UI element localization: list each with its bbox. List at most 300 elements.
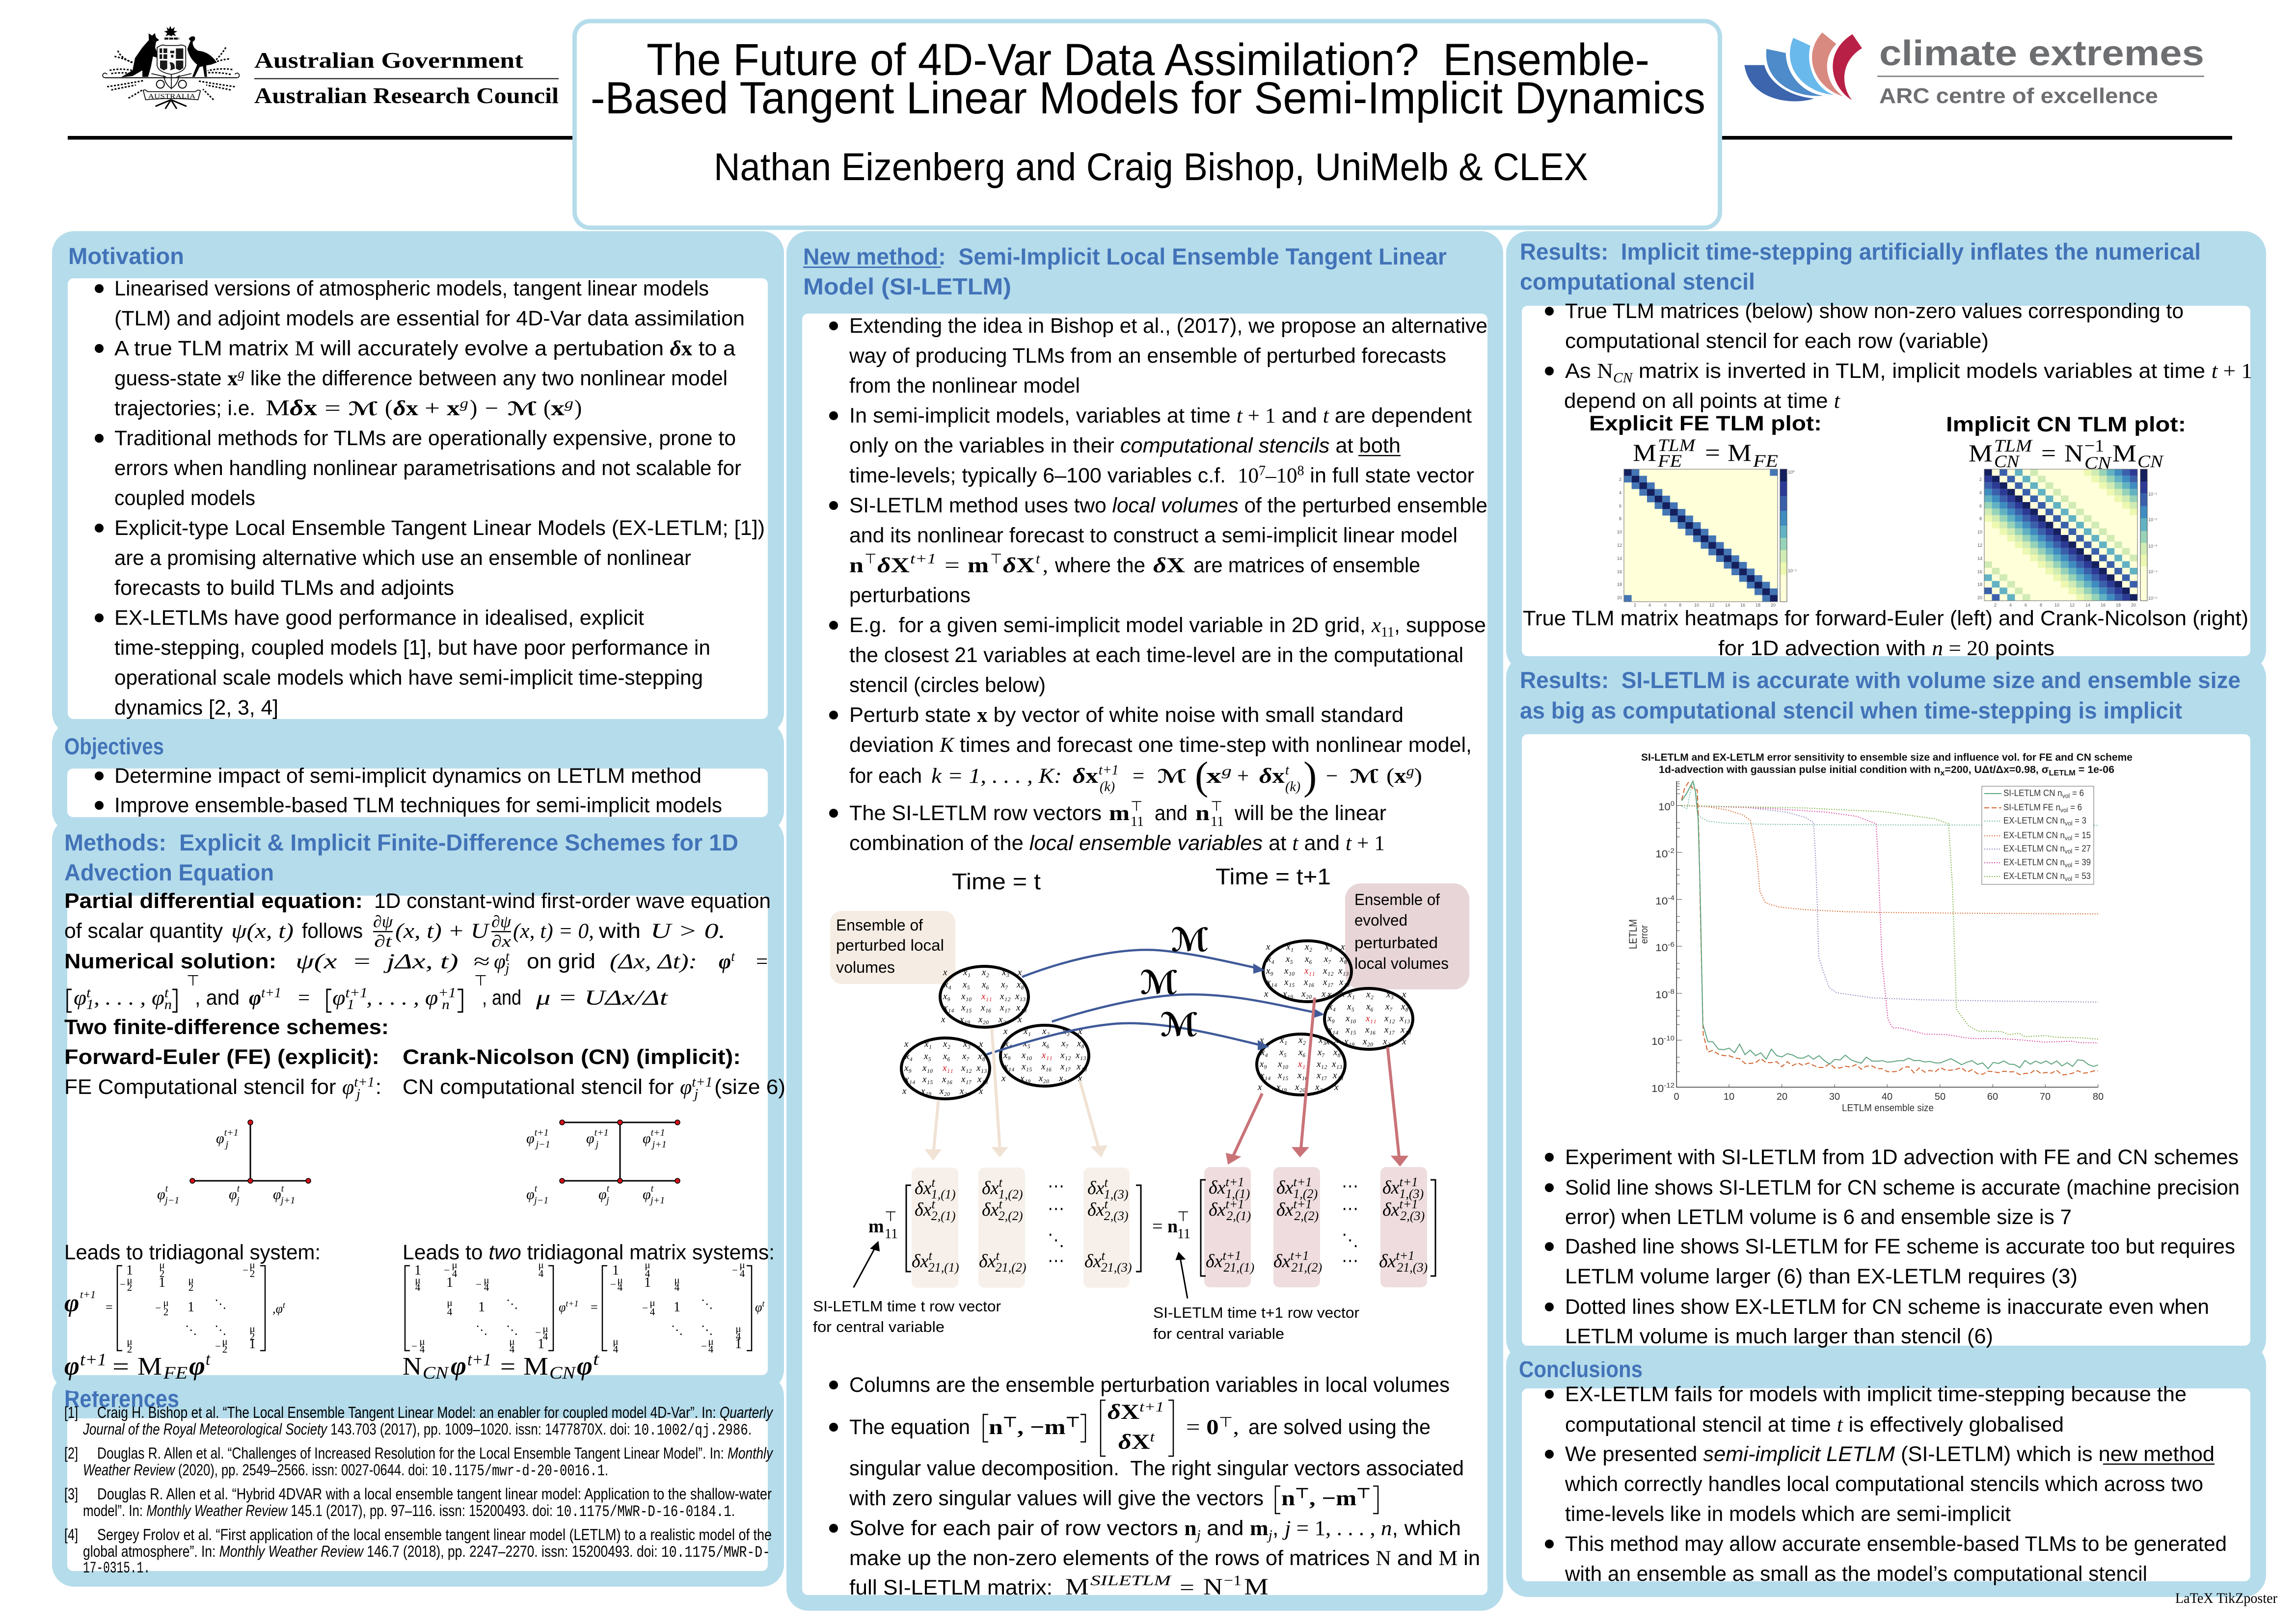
plot lines and axes <box>1676 781 2098 1087</box>
equation: CN matrix system: − <box>732 1264 738 1276</box>
local volume: ensemble member at time t, top: x₂ <box>981 967 989 978</box>
equation: CN update: CN <box>549 1363 576 1383</box>
equation: CN matrix system: μ <box>674 1274 680 1286</box>
local volume: evolved member at time t+1, right: x <box>1402 989 1406 1000</box>
equation: FE matrix system: ⋱ <box>185 1323 197 1337</box>
local volume: evolved member at time t+1, right: x₁₃ <box>1399 1013 1410 1024</box>
local volume: ensemble member at time t, left: x₁₁ <box>942 1063 953 1073</box>
heading: explicit FE TLM plot: M <box>1728 439 1752 466</box>
heading: explicit FE TLM plot: M <box>1633 439 1656 466</box>
equation: CN matrix system: 4 <box>708 1343 714 1355</box>
chart: FE stencil: φt+1 j <box>216 1127 239 1150</box>
equation: FE matrix system: = <box>106 1300 113 1314</box>
equation: matrix relation between time levels: ⋯ <box>1048 1199 1064 1219</box>
bullet list: lower method description: M <box>1244 1574 1269 1600</box>
axis labels: FE heatmap: 2 <box>1619 477 1621 482</box>
bullet list: lower method description: are solved using the <box>1248 1415 1431 1439</box>
local volume: ensemble member at time t, top: x₇ <box>1000 980 1008 990</box>
heading: implicit CN TLM plot: = <box>2041 439 2056 467</box>
equation: FE matrix system: ⋱ <box>215 1323 226 1337</box>
local volume: evolved member at time t+1, top: x₄ <box>1267 954 1274 964</box>
label: time t: Time = t <box>952 869 1041 894</box>
bullet list: motivation: are a promising alternative which use an ensemble of nonlinear <box>114 546 691 570</box>
bullet list: upper method description: δx <box>1073 765 1099 788</box>
bullet list: upper method description: SI-LETLM method uses two local volumes of the perturbed ensemble <box>849 494 1487 517</box>
local volume: ensemble member at time t, top: x₁₉ <box>959 1014 971 1025</box>
bullet list: upper method description: m <box>1109 802 1130 825</box>
caption: time t row vector: SI-LETLM time t row vector <box>813 1298 1001 1315</box>
caption: time t row vector: for central variable <box>813 1318 945 1335</box>
legend <box>1982 786 2094 884</box>
equation: CN matrix system: 4 <box>736 1330 741 1342</box>
equation: FE matrix system: 2 <box>189 1281 193 1293</box>
text: numerical solution: = <box>298 986 310 1010</box>
local volume: evolved member at time t+1, right: x₂₁ <box>1382 1037 1394 1047</box>
equation: matrix relation between time levels: ⋯ <box>1342 1251 1358 1271</box>
local volume: evolved member at time t+1, bottom: x₉ <box>1259 1059 1267 1069</box>
heading: results accuracy: Results: SI-LETLM is accurate with volume size and ensemble size <box>1520 667 2241 693</box>
text: numerical solution: φt <box>719 949 735 973</box>
equation: matrix relation between time levels: δxt2,(1) <box>915 1197 956 1223</box>
caption: time t+1 row vector <box>1153 1304 1359 1342</box>
local volume: evolved member at time t+1, right: x₁₅ <box>1345 1025 1356 1035</box>
bullet list: conclusions: We presented semi-implicit LETLM (SI-LETLM) which is new method <box>1565 1442 2215 1466</box>
bullet list: TLM matrices <box>1545 299 2252 413</box>
equation: FE matrix system: μ <box>188 1274 194 1286</box>
colorbar: FE heatmap: 10⁰ <box>1788 470 1795 475</box>
y axis tick labels: 10-6 <box>1655 940 1675 954</box>
y axis tick labels <box>1651 799 1675 1094</box>
bullet list: motivation: δx <box>393 397 419 420</box>
equation: CN matrix system: 4 <box>650 1306 655 1318</box>
bullet list: objectives: Improve ensemble-based TLM techniques for semi-implicit models <box>114 794 722 817</box>
equation: FE matrix system: 2 <box>250 1268 255 1279</box>
local volume: evolved member at time t+1, top: x₁₉ <box>1282 989 1294 999</box>
heading: implicit CN TLM plot: TLM <box>1994 436 2033 455</box>
equation: CN matrix system: = <box>591 1300 598 1314</box>
axis labels: FE heatmap: 20 <box>1771 603 1776 608</box>
icon: coat of arms crest: AUSTRALIA <box>148 93 196 100</box>
local volume: evolved member at time t+1, right: x₁₈ <box>1400 1025 1411 1035</box>
axis labels: CN heatmap: 12 <box>1977 543 1982 548</box>
chart: CN stencil <box>526 1120 680 1206</box>
legend: SI-LETLM CN nvol = 6 <box>2003 788 2084 799</box>
local volume: ensemble member at time t, top: x <box>1017 967 1022 978</box>
bullet list: lower method description: with zero singular values will give the vectors <box>849 1487 1264 1510</box>
equation: FE matrix system: − <box>215 1340 221 1352</box>
local volume: evolved member at time t+1, right: x₇ <box>1385 1002 1393 1012</box>
equation: matrix relation between time levels: δxt1,(2) <box>982 1175 1023 1201</box>
local volume: ensemble member at time t, top: x₂₀ <box>978 1014 989 1025</box>
bullet list: motivation: ) <box>470 395 477 420</box>
heading: Crank-Nicolson: Crank-Nicolson (CN) (implicit): <box>403 1045 741 1069</box>
local volume: evolved member at time t+1, bottom: x₁₂ <box>1316 1059 1327 1069</box>
axis labels: CN heatmap: 12 <box>2070 603 2075 608</box>
bullet list: upper method description: stencil (circles below) <box>849 673 1046 697</box>
axis labels: CN heatmap: 6 <box>2025 603 2027 608</box>
bullet list: upper method description: δX <box>877 554 910 577</box>
equation: matrix relation between time levels: 11 <box>1177 1226 1190 1242</box>
bullet list: upper method description: t+1 <box>1099 763 1119 778</box>
logo: Australian Government crest and wordmark <box>103 26 559 109</box>
reference list: Sergey Frolov et al. “First application of the local ensemble tangent linear model (LETLM) to a realistic model of the <box>97 1526 772 1543</box>
bullet list: motivation: − <box>485 397 498 420</box>
bullet list: motivation: errors when handling nonlinear parametrisations and not scalable for <box>114 456 741 480</box>
equation: matrix relation between time levels: ⋱ <box>1342 1230 1358 1250</box>
equation: CN matrix system: 4 <box>510 1343 515 1355</box>
local volume: ensemble member at time t, top: x₁ <box>963 967 971 978</box>
local volume: evolved member at time t+1, top: x₆ <box>1304 954 1312 964</box>
equation: CN matrix system: 1 <box>612 1263 619 1278</box>
bullet list: upper method description: t <box>1036 551 1040 567</box>
text: numerical solution: (Δx, Δt): <box>610 950 697 973</box>
local volume: ensemble member at time t, right: x₁₀ <box>1021 1050 1032 1061</box>
text: partial differential equation: ψ(x, t) <box>231 920 294 943</box>
equation: FE matrix system: 2 <box>127 1343 132 1355</box>
local volume: ensemble member at time t, top: x₂₁ <box>998 1014 1009 1025</box>
axis labels: FE heatmap: 8 <box>1619 516 1621 521</box>
local volume: ensemble member at time t, top: x₁₈ <box>1016 1003 1027 1013</box>
text: numerical solution: φt+1 <box>249 985 281 1010</box>
panel: motivation <box>52 231 784 735</box>
local volume: ensemble member at time t, left: x <box>978 1039 983 1049</box>
axis labels: FE heatmap: 10 <box>1617 530 1622 534</box>
bullet list: upper method description: In semi-implicit models, variables at time t + 1 and t are dependent <box>849 404 1472 427</box>
bullet list: upper method description: x g <box>1206 764 1232 788</box>
equation: CN matrix system: μ <box>645 1259 650 1271</box>
reference list: model”. In: Monthly Weather Review 145.1 (2017), pp. 97–116. issn: 15200493. doi: 10.1175/MWR-D-16-0184.1. <box>83 1502 735 1521</box>
equation: CN matrix system: − <box>535 1327 541 1338</box>
equation: CN update: φ <box>451 1351 466 1381</box>
legend: EX-LETLM CN nvol = 27 <box>2003 844 2091 855</box>
local volume: evolved member at time t+1, right: x₉ <box>1327 1013 1335 1024</box>
local volume: evolved member at time t+1, top: x₂₀ <box>1301 989 1312 999</box>
reference list: [1] <box>64 1404 78 1421</box>
x axis tick labels: 40 <box>1882 1091 1892 1102</box>
local volume: ensemble member at time t, right: x₁ <box>1023 1026 1031 1037</box>
equation: CN matrix system: ⋱ <box>476 1323 487 1337</box>
bullet list: upper method description: δX <box>1003 554 1035 577</box>
local volume: evolved member at time t+1, right: x₁₇ <box>1384 1025 1395 1035</box>
axis labels: FE heatmap: 8 <box>1679 603 1681 608</box>
caption: TLM heatmaps: for 1D advection with n = 20 points <box>1718 637 2054 660</box>
local volume: ensemble member at time t, right: x₁₈ <box>1076 1062 1087 1072</box>
bullet list: TLM matrices: depend on all points at time t <box>1564 389 1840 413</box>
diagram: local ensemble volumes to matrix equation <box>813 864 1469 1342</box>
axis labels: CN heatmap: 6 <box>1979 504 1982 508</box>
equation: CN update <box>403 1349 599 1383</box>
series: SI-LETLM FE nvol 6 <box>1682 782 2098 1075</box>
local volume: evolved member at time t+1, right <box>1324 988 1413 1049</box>
bullet list: lower method description: = 0⊤, <box>1186 1415 1239 1439</box>
bullet list: lower method description: = <box>1180 1576 1194 1599</box>
bullet list: experiment findings: Dotted lines show EX-LETLM for CN scheme is inaccurate even when <box>1565 1295 2209 1319</box>
local volume: evolved member at time t+1, bottom: x <box>1334 1035 1339 1045</box>
heading: new method: New method: Semi-Implicit Local Ensemble Tangent Linear <box>803 243 1447 269</box>
equation: CN matrix system: 4 <box>539 1268 544 1279</box>
equation: CN matrix system: 4 <box>415 1281 421 1293</box>
bullet list: motivation: (TLM) and adjoint models are essential for 4D-Var data assimilation <box>114 307 745 330</box>
equation: FE matrix system: t+1 <box>80 1288 96 1301</box>
callout: ensemble of evolved perturbated local volumes: perturbated <box>1354 934 1438 952</box>
axis labels: FE heatmap: 6 <box>1664 603 1667 608</box>
heading: implicit CN TLM plot: Implicit CN TLM plot: <box>1946 413 2186 436</box>
local volume: ensemble member at time t, left: x₂ <box>943 1039 950 1049</box>
bullet list: conclusions <box>1545 1383 2227 1586</box>
equation: CN matrix system: μ <box>542 1323 548 1334</box>
equation: matrix relation between time levels <box>868 1175 1435 1276</box>
bullet list: lower method description: Solve for each pair of row vectors nj and mj, j = 1, . . . , n, which <box>849 1517 1461 1543</box>
bullet list: upper method description: (k) <box>1100 779 1115 795</box>
bullet list: lower method description: singular value decomposition. The right singular vectors associated <box>849 1457 1464 1480</box>
bullet list: upper method description: will be the linear <box>1234 801 1386 825</box>
axis labels: CN heatmap: 20 <box>1977 595 1982 600</box>
equation: CN matrix system: μ <box>419 1335 425 1347</box>
text: numerical solution: , and <box>482 986 521 1010</box>
chart: CN stencil: φt+1 j+1 <box>643 1127 667 1150</box>
equation: matrix relation between time levels: δxt21,(2) <box>979 1249 1026 1275</box>
local volume: ensemble member at time t, right: x₂₀ <box>1038 1073 1050 1084</box>
series: SI-LETLM CN nvol 6 <box>1682 781 2098 1069</box>
bullet list: upper method description <box>829 314 1487 855</box>
reference list <box>64 1404 774 1577</box>
local volume: evolved member at time t+1, top: x₁₃ <box>1338 966 1349 976</box>
equation: CN matrix system: − <box>610 1278 616 1290</box>
chart: CN stencil: φt+1 j−1 <box>526 1127 550 1150</box>
local volume: ensemble member at time t, top: x₁₁ <box>981 991 992 1002</box>
equation: FE matrix system: ⋱ <box>215 1297 226 1311</box>
bullet list: motivation: xg <box>447 396 468 420</box>
callout: ensemble of evolved perturbated local volumes: Ensemble of <box>1354 891 1440 908</box>
local volume: ensemble member at time t, top: x₃ <box>1001 967 1009 978</box>
local volume: evolved member at time t+1, bottom: x <box>1259 1035 1264 1045</box>
local volume: ensemble member at time t, right: x <box>1078 1026 1082 1037</box>
text: partial differential equation: ∂t <box>374 932 393 951</box>
title: -Based Tangent Linear Models for Semi-Implicit Dynamics <box>591 73 1705 123</box>
chart: FE stencil: φt j <box>229 1183 240 1206</box>
local volume: evolved member at time t+1, bottom: x₃ <box>1318 1035 1326 1045</box>
text: partial differential equation: ∂ψ <box>491 913 512 931</box>
reference list: Craig H. Bishop et al. “The Local Ensemble Tangent Linear Model: an enabler for coupled model 4D-Var”. In: Quarterly <box>97 1404 774 1421</box>
local volume: evolved member at time t+1, right: x₃ <box>1386 989 1394 1000</box>
chart title <box>1641 752 2133 777</box>
colorbar: FE heatmap: 10⁻¹ <box>1788 568 1797 573</box>
local volume: evolved member at time t+1, bottom: x₁ <box>1279 1035 1287 1045</box>
panel: new method <box>786 231 1503 1611</box>
equation: CN matrix system: μ <box>484 1274 489 1286</box>
text: numerical solution: Numerical solution: <box>64 950 276 973</box>
heading: references: References <box>64 1385 179 1412</box>
local volume: ensemble member at time t, top: x <box>941 1014 945 1025</box>
local volume: ensemble member at time t, right: x <box>1003 1026 1008 1037</box>
panel: conclusions <box>1506 1343 2266 1597</box>
text: numerical solution: ⊤ <box>474 973 487 989</box>
bullet list: upper method description: only on the variables in their computational stencils at both <box>849 434 1401 457</box>
axis labels: FE heatmap: 18 <box>1756 603 1760 608</box>
local volume: ensemble member at time t, top: x₈ <box>1016 980 1024 990</box>
bullet list: upper method description: (k) <box>1285 779 1300 795</box>
arrows: row vector pointers <box>854 1241 1188 1299</box>
series: EX-LETLM CN nvol 53 <box>1682 805 2098 1039</box>
equation: FE matrix system: − <box>120 1278 126 1290</box>
bullet list: upper method description: ℳ <box>1157 766 1187 787</box>
bullet list: lower method description: δX t+1 <box>1107 1400 1164 1424</box>
equation: matrix relation between time levels: ⊤ <box>885 1209 896 1224</box>
legend: EX-LETLM CN nvol = 3 <box>2003 816 2086 827</box>
callout: ensemble of perturbed local volumes: volumes <box>836 958 895 976</box>
colorbar: FE heatmap <box>1780 469 1797 602</box>
colorbar: CN heatmap: 10⁻⁴ <box>2148 569 2158 574</box>
bullet list: experiment findings: Experiment with SI-LETLM from 1D advection with FE and CN schemes <box>1565 1145 2239 1169</box>
heading: implicit CN TLM plot: CN <box>1994 452 2020 471</box>
axis labels: FE heatmap: 4 <box>1619 490 1621 495</box>
local volume: ensemble member at time t, left: x₁₉ <box>920 1086 932 1096</box>
bullet list: conclusions: This method may allow accurate ensemble-based TLMs to be generated <box>1565 1532 2227 1556</box>
x axis tick labels: 30 <box>1829 1091 1840 1102</box>
local volume: evolved member at time t+1, bottom: x₆ <box>1298 1047 1306 1058</box>
local volume: evolved member at time t+1, top: x₅ <box>1285 954 1293 964</box>
equation: CN matrix system: 1 <box>478 1300 485 1315</box>
title <box>591 35 1705 123</box>
bullet list: upper method description: combination of the local ensemble variables at t and t + 1 <box>849 831 1385 855</box>
local volume: evolved member at time t+1, top: x₃ <box>1324 942 1332 952</box>
bullet list: motivation: Mδx <box>266 395 317 420</box>
local volume: evolved member at time t+1, right: x₅ <box>1347 1002 1354 1012</box>
local volume: evolved member at time t+1, bottom: x <box>1257 1082 1262 1092</box>
text: partial differential equation: Partial differential equation: <box>64 889 363 913</box>
local volume: ensemble member at time t, left: x₁₂ <box>961 1063 972 1073</box>
reference list: global atmosphere”. In: Monthly Weather Review 146.7 (2018), pp. 2247–2270. issn: 15200493. doi: 10.1175/MWR-D- <box>83 1543 770 1562</box>
local volume: evolved member at time t+1, top: x₁₈ <box>1339 977 1350 987</box>
axis labels: FE heatmap: 16 <box>1740 603 1745 608</box>
local volume: ensemble member at time t, left: x₁ <box>924 1039 932 1049</box>
equation: FE matrix system: μ <box>127 1335 133 1347</box>
bullet list: motivation: Linearised versions of atmospheric models, tangent linear models <box>114 277 709 300</box>
panel: results SI-LETLM accuracy <box>1506 655 2266 1361</box>
text: numerical solution: , and <box>195 986 240 1010</box>
matrix column backgrounds <box>912 1167 1427 1288</box>
local volume: ensemble member at time t, left: x₁₇ <box>961 1074 972 1085</box>
local volume: evolved member at time t+1, right: x₁₄ <box>1327 1025 1339 1035</box>
colorbar: CN heatmap: 10⁻³ <box>2148 544 2157 549</box>
equation: matrix relation between time levels: ⋯ <box>1342 1199 1358 1219</box>
equation: matrix relation between time levels: δxt21,(1) <box>912 1249 959 1275</box>
caption: TLM heatmaps <box>1523 607 2248 660</box>
text: partial differential equation: (x, t) = 0, <box>513 920 594 943</box>
heading: explicit FE TLM plot: TLM <box>1658 435 1696 455</box>
heading: results implicit time-stepping <box>1520 239 2201 294</box>
equation: CN matrix system: μ <box>509 1335 515 1347</box>
bullet list: lower method description: full SI-LETLM matrix: <box>849 1576 1053 1599</box>
local volume: ensemble member at time t, left: x <box>902 1086 907 1096</box>
bullet list: motivation: Traditional methods for TLMs are operationally expensive, prone to <box>114 426 736 450</box>
axis labels: CN heatmap: 14 <box>1977 556 1982 561</box>
reference list: [3] <box>64 1485 78 1503</box>
equation: CN matrix system: − <box>642 1302 648 1314</box>
local volume: ensemble member at time t, left: x₂₁ <box>959 1086 971 1096</box>
legend: EX-LETLM CN nvol = 15 <box>2003 830 2091 842</box>
equation: FE matrix system: μ <box>249 1323 255 1334</box>
local volume: evolved member at time t+1, top: x <box>1266 942 1270 952</box>
local volume: ensemble member at time t, left: x₆ <box>943 1051 950 1062</box>
local volume: evolved member at time t+1, right: x₁₆ <box>1365 1025 1376 1035</box>
local volume: evolved member at time t+1, right: x₁₉ <box>1344 1037 1355 1047</box>
bullet list: TLM matrices: computational stencil for each row (variable) <box>1565 329 1989 353</box>
footer: LaTeX TikZposter credit: LaTeX TikZposter <box>2175 1590 2277 1606</box>
local volume: evolved member at time t+1, right: x₁₀ <box>1345 1013 1356 1024</box>
authors: Nathan Eizenberg and Craig Bishop, UniMelb & CLEX <box>714 145 1588 188</box>
bullet list: TLM matrices: As NCN matrix is inverted in TLM, implicit models variables at time t + 1 <box>1565 359 2252 386</box>
series: EX-LETLM CN nvol 27 <box>1682 805 2098 1002</box>
bullet list: experiment findings: error) when LETLM volume is 6 and ensemble size is 7 <box>1565 1205 2072 1229</box>
heading: results implicit time-stepping: computational stencil <box>1520 268 1755 294</box>
chart: CN stencil: φt j−1 <box>526 1183 548 1206</box>
local volume: evolved member at time t+1, top: x₁₆ <box>1303 977 1315 987</box>
chart: FE stencil: φt j−1 <box>157 1183 179 1206</box>
local volume: evolved member at time t+1, top: x₁₄ <box>1266 977 1277 987</box>
bullet list: upper method description: , <box>1043 554 1048 577</box>
bullet list: lower method description: M <box>1065 1574 1089 1600</box>
axis labels: FE heatmap: 4 <box>1648 603 1651 608</box>
equation: CN matrix system: 4 <box>645 1268 650 1279</box>
labels: nonlinear model operator: ℳ <box>1171 921 1209 959</box>
equation: matrix relation between time levels: δxt+121,(3) <box>1379 1249 1428 1275</box>
heading: explicit FE TLM plot <box>1589 412 1822 471</box>
local volume: ensemble member at time t, left: x₁₀ <box>922 1063 933 1073</box>
chart title: 1d-advection with gaussian pulse initial condition with n x=200, UΔt/Δx=0.98, σ LETLM = 1e-06 <box>1659 764 2114 777</box>
local volume: ensemble member at time t, top: x₁₀ <box>961 991 972 1002</box>
heading: implicit CN TLM plot: CN <box>2137 452 2164 471</box>
reference list: Journal of the Royal Meteorological Society 143.703 (2017), pp. 1009–1020. issn: 1477870X. doi: 10.1002/qj.2986. <box>82 1420 752 1439</box>
equation: FE update: = <box>112 1353 129 1380</box>
panel: results implicit time-stepping <box>1470 231 2283 672</box>
local volume: ensemble member at time t, right: x₁₅ <box>1021 1062 1032 1072</box>
local volume: ensemble member at time t, right: x₃ <box>1062 1026 1070 1037</box>
local volume: evolved member at time t+1, top: x₁₂ <box>1323 966 1334 976</box>
bullet list: upper method description: δx <box>1259 765 1285 788</box>
axis labels: FE heatmap: 10 <box>1694 603 1699 608</box>
bullet list: lower method description: Columns are the ensemble perturbation variables in local volumes <box>849 1373 1450 1397</box>
equation: FE update: φ <box>189 1351 205 1381</box>
local volume: evolved member at time t+1, top: x <box>1340 942 1345 952</box>
bullet list: upper method description: n <box>1195 802 1210 825</box>
bullet list: upper method description: Perturb state x by vector of white noise with small standard <box>849 703 1404 727</box>
local volume: evolved member at time t+1, bottom <box>1257 1034 1345 1095</box>
colorbar: CN heatmap <box>2140 469 2158 601</box>
bullet list: upper method description: deviation K times and forecast one time-step with nonlinear model, <box>849 733 1472 757</box>
local volume: ensemble member at time t, left: x <box>978 1086 983 1096</box>
axis labels: CN heatmap: 16 <box>1977 569 1982 574</box>
equation: CN matrix system: μ <box>415 1274 421 1286</box>
local volume: ensemble member at time t, top: x₅ <box>962 980 970 990</box>
equation: CN matrix system: 4 <box>420 1343 425 1355</box>
bullet list: upper method description: = <box>945 554 960 577</box>
chart title: SI-LETLM and EX-LETLM error sensitivity to ensemble size and influence vol. for FE and CN scheme <box>1641 752 2133 763</box>
local volume: evolved member at time t+1, bottom: x₁₃ <box>1331 1059 1343 1069</box>
chart: FE TLM heatmap <box>1617 469 1797 607</box>
heading: methods: Advection Equation <box>64 859 274 885</box>
equation: CN matrix system: 1 <box>538 1336 544 1352</box>
text: numerical solution <box>64 949 768 1012</box>
axis labels: CN heatmap: 14 <box>2085 603 2090 608</box>
callout: ensemble of evolved perturbated local volumes <box>1345 883 1469 989</box>
bullet list: motivation: time-stepping, coupled models [1], but have poor performance in <box>114 636 710 660</box>
equation: CN matrix system: φt+1 <box>559 1299 579 1314</box>
equation: CN matrix system: 4 <box>613 1343 619 1355</box>
panel: references <box>52 1374 784 1587</box>
equation: CN matrix system: μ <box>739 1259 745 1271</box>
local volume: ensemble member at time t, top: x <box>943 967 947 978</box>
